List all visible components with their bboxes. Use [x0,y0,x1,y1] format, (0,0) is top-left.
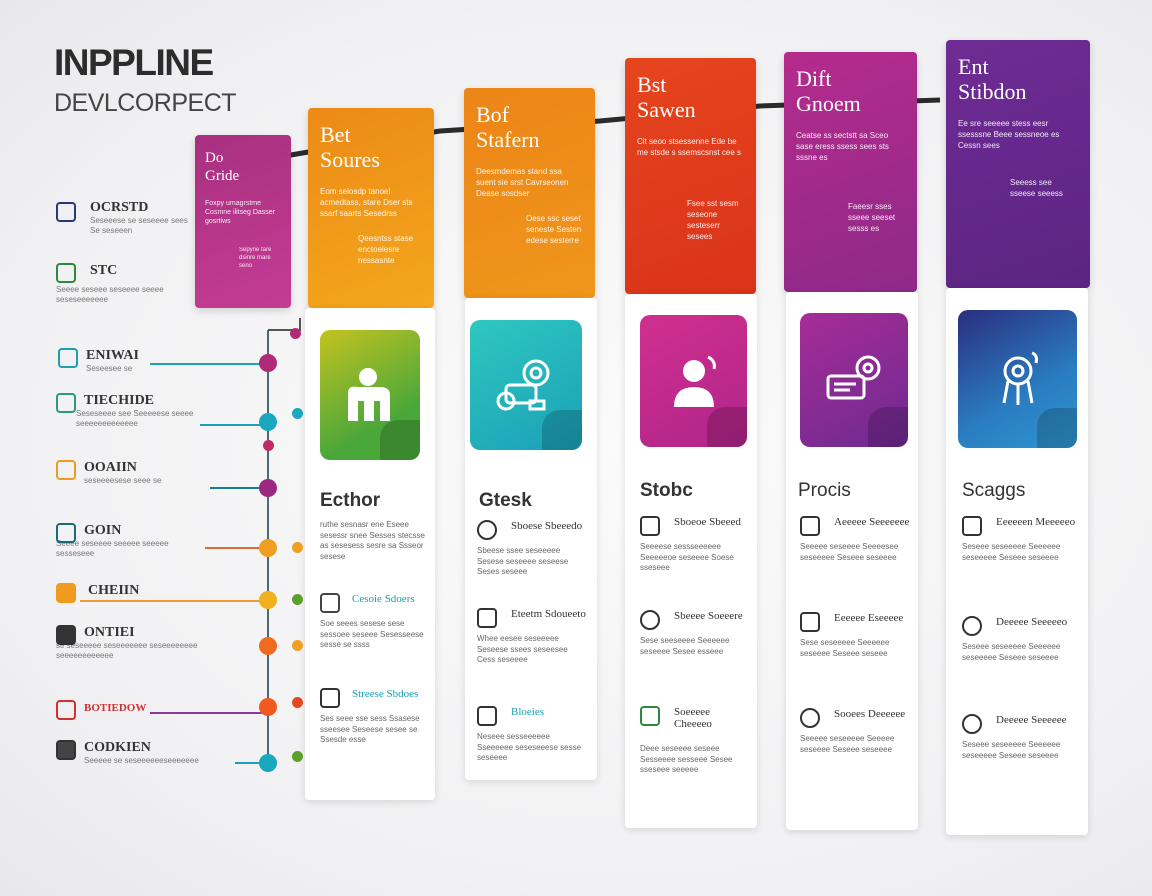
title: INPPLINE [54,42,213,83]
header: col2: Qeesntss stase enctoelesre nessasnte [358,234,413,265]
header: col5: Faeesr sses sseee seeset sesss es [848,202,895,233]
item OCRSTD: Seseeese se seseeee sees Se seseeen [90,216,188,235]
item TIECHIDE: TIECHIDE [84,393,154,408]
item GOIN [56,523,169,558]
header: col1: Gride [205,168,239,184]
item CODKIEN: CODKIEN [84,740,151,755]
header: col4: Cit seoo stsessenne Ede be me stsde s ssemscsnst cee s [637,137,741,157]
card col4: Soeeeee Cheeeeo [674,706,712,730]
icon tile magenta [640,315,747,447]
header: col5: Gnoem [796,91,861,116]
header: col1: Foxpy umagrstme Cosmne ilitseg Dasser gosrtiws [205,200,275,225]
card col5: Sooees Deeeeee [834,708,905,720]
timeline dots [259,328,303,772]
title [54,42,236,117]
card col4: Sboeoe Sbeeed [674,516,741,528]
header: col4: Sawen [637,97,696,122]
item CHEIIN: CHEIIN [88,583,139,598]
heading Ecthor: Ecthor [320,490,380,511]
header: col4: Fsee sst sesm seseone sesteserr sesees [687,199,739,241]
header: col6: Seeess see sseese seeess [1010,178,1063,198]
item TIECHIDE: Seseseeee see Seeeeese seeee seeeeeeeeeeeee [76,409,193,428]
card col4: Sbeeee Soeeere [674,610,743,622]
left timeline items [56,200,262,765]
item STC [56,263,164,304]
header: col1 [195,135,291,308]
icon tile purple [800,313,908,447]
header: col5: Ceatse ss sectstt sa Sceo sase eress ssess sees sts sssne es [796,131,889,162]
card col5 [786,292,918,830]
card col2 [305,308,435,800]
item ONTIEI: ONTIEI [84,625,135,640]
item ONTIEI [56,625,198,660]
header: col3: Stafern [476,127,540,152]
item CODKIEN: Seeeee se seseeeeeeseeeeeee [84,756,199,765]
item BOTIEDOW: BOTIEDOW [84,702,146,714]
header: col2: Soures [320,147,380,172]
card col4 [625,294,757,828]
card col6 [946,288,1088,835]
card col6: Deeeee Seeeeee [996,714,1067,726]
card col5: Sese seseeeee Seeeeee seseeee Seseee seseee [800,638,889,658]
heading Procis: Procis [798,480,851,501]
heading Gtesk: Gtesk [479,490,532,511]
card col3: Neseee sesseeeeee Sseeeeee seseseeese sesse seseeee [477,732,581,762]
card col6: Seseee seseeeee Seeeeee seseeeee Seseee seseeee [962,542,1060,562]
item STC: STC [90,263,117,278]
card col2: Ses seee sse sess Ssasese sseesee Seseese sesee se Ssesde esse [320,714,420,744]
card col6: Deeeee Seeeeeo [996,616,1067,628]
header: col6 [946,40,1090,288]
card col6: Seseee seseeeee Seeeeee seseeeee Seseee seseeee [962,740,1060,760]
item ENIWAI: Seseesee se [86,364,132,373]
item OCRSTD [56,200,188,235]
card col5: Seeeee seseeee Seeeesee seseeeee Seseee seseeee [800,542,898,562]
item OOAIIN [56,460,162,485]
card col5: Eeeeee Eseeeee [834,612,903,624]
card col3: Sboese Sbeeedo [511,520,582,532]
card col6: Eeeeeen Meeeeeo [996,516,1075,528]
header: col1: Sepyne tare dsinre mare seno [239,247,271,269]
item ONTIEI: se seseeeee seseeeeeee seseeeeeeee seeeeeeeeeeee [56,641,197,660]
header: col5 [784,52,917,292]
header: col6: Ent [958,54,989,79]
item ENIWAI [58,348,139,373]
item GOIN: GOIN [84,523,121,538]
card col5: Seeeee seseeeee Seeeee seseeee Seseee seseeee [800,734,894,754]
card col2: Streese Sbdoes [352,688,418,700]
card col3: Eteetm Sdoueeto [511,608,586,620]
header: col1: Do [205,150,223,166]
item CHEIIN [56,583,140,603]
card col2: Cesoie Sdoers [352,593,415,605]
item BOTIEDOW [56,700,146,720]
header: col4 [625,58,756,294]
card col3: Sbeese ssee seseeeee Sesese seseeee seseese Seses seseee [477,546,568,576]
item OCRSTD: OCRSTD [90,200,148,215]
icon tile green [320,330,420,460]
item STC: Seeee seseee seseeee seeee seseseeeeeee [56,285,164,304]
header: col2 [308,108,434,308]
item CODKIEN [56,740,199,765]
header: col4: Bst [637,72,666,97]
item ENIWAI: ENIWAI [86,348,139,363]
card col6: Seseee seseeeee Seeeeee seseeeee Seseee seseeee [962,642,1060,662]
header: col6: Ee sre seeeee stess eesr ssesssne Beee sessneoe es Cessn sees [958,119,1059,150]
title: DEVLCORPECT [54,89,236,117]
item OOAIIN: seseeeesese seee se [84,476,161,485]
header: col3: Oese ssc seset seneste Sesten edese sesterre [526,214,581,245]
card col3: Bloeies [511,706,544,718]
item TIECHIDE [56,393,194,428]
item GOIN: Seeee seseeee seeeee seeeee sesseseee [56,539,169,558]
header: col3: Deesmdemas stand ssa suent sie srst Cavrseonen Dease sosdser [476,167,568,198]
header: col3 [464,88,595,298]
card col5: Aeeeee Seeeeeee [834,516,909,528]
card col2: ruthe sesnasr ene Eseee sesessr snee Sesses stecsse as sesesess sesre sa Ssseor sesese [320,520,425,560]
header: col5: Dift [796,66,831,91]
card col4: Deee seseeee seseee Sesseeee sesseee Sesee sseseee seeeee [640,744,733,774]
card col4: Sese seeseeee Seeeeee seseeee Sesee esseee [640,636,729,656]
card col2: Soe seees sesese sese sessoee seseee Sesesseese sesse se ssss [320,619,424,649]
icon tile blue [958,310,1077,448]
item OOAIIN: OOAIIN [84,460,137,475]
header: col2: Bet [320,122,351,147]
card col4: Seeeese sessseeeeee Seeeeeoe seseeee Soese sseseee [640,542,734,572]
header: col2: Eom selosdp tanoel acmedtass, stare Dser sts ssarf saarts Sesedrss [320,187,412,218]
card col3: Whee eesee seseeeee Seseese ssees seseesee Cess seseeee [477,634,568,664]
icon tile teal [470,320,582,450]
header: col3: Bof [476,102,509,127]
heading Stobc: Stobc [640,480,693,501]
heading Scaggs: Scaggs [962,480,1025,501]
header: col6: Stibdon [958,79,1026,104]
card col3 [465,298,597,780]
